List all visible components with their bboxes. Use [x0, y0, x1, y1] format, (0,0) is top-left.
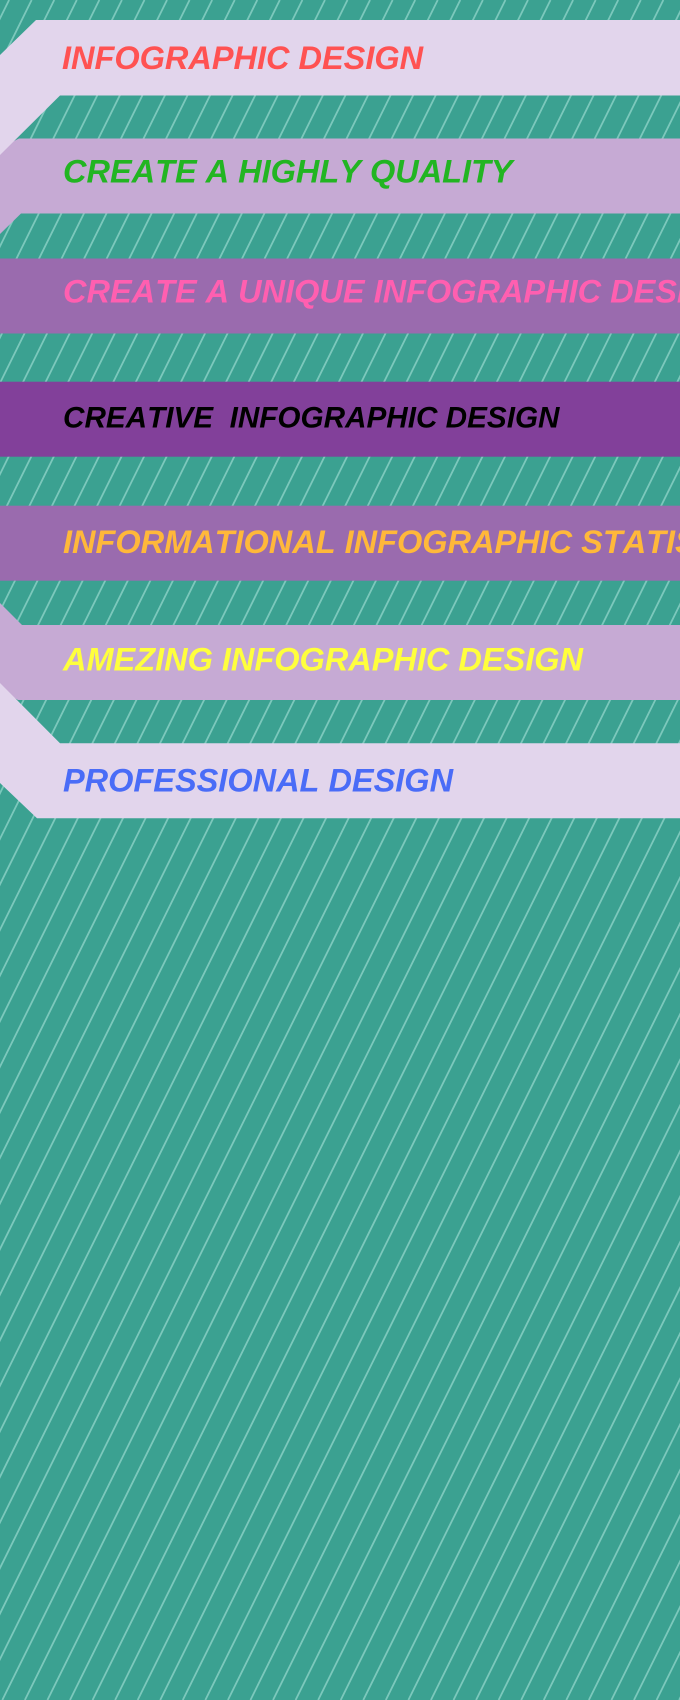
heading: infographic design: INFOGRAPHIC DESIGN — [62, 40, 425, 76]
panel: band 7 professional design — [0, 683, 680, 818]
panel: band 3 unique infographic — [0, 258, 680, 334]
panel: band 6 amezing infographic — [0, 603, 680, 700]
heading: create a highly quality: CREATE A HIGHLY QUALITY — [63, 154, 516, 190]
panel: band 4 creative infographic — [0, 382, 680, 457]
panel: band 1 infographic design — [0, 20, 680, 155]
heading: creative infographic design: CREATIVE INFOGRAPHIC DESIGN — [63, 402, 560, 435]
heading: amezing infographic design: AMEZING INFOGRAPHIC DESIGN — [62, 642, 585, 678]
panel: band 2 create a highly quality — [0, 138, 680, 234]
heading: professional design: PROFESSIONAL DESIGN — [63, 763, 455, 799]
panel: band 5 informational statistics — [0, 506, 680, 581]
